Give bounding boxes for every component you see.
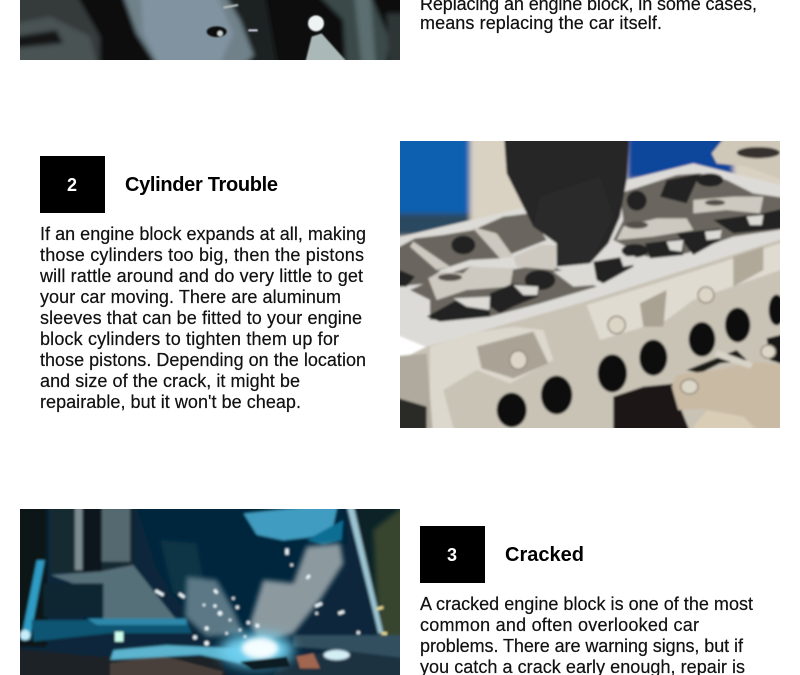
left glow bar: [21, 560, 45, 640]
text block: cylinder trouble description: will rattle around and do very little to get: [39, 266, 363, 286]
cylinder ports: [497, 295, 785, 427]
panel: section 3 cracked: [420, 526, 753, 675]
text block: cracked description: common and often overlooked car: [420, 615, 699, 635]
bench: [32, 620, 192, 642]
dark bottom area: [612, 382, 690, 428]
text block: top section continuation: means replacing the car itself.: [420, 13, 662, 33]
heading: cracked: Cracked: [505, 544, 584, 566]
number badge 2: [40, 156, 105, 213]
photo: gloved hand on cylinder head: [400, 141, 780, 428]
number badge 3: 3: [447, 545, 457, 565]
text block: cracked description: A cracked engine block is one of the most: [420, 594, 753, 614]
block front face: [410, 239, 780, 428]
text block: cylinder trouble description: If an engine block expands at all, making: [40, 224, 366, 244]
number badge 2: 2: [67, 175, 77, 195]
text block: cylinder trouble description: and size of the crack, it might be: [40, 371, 300, 391]
text block: cylinder trouble description: those cylinders too big, then the pistons: [40, 245, 364, 265]
number badge 3: [420, 526, 485, 583]
background structure: [20, 509, 48, 649]
lower left corner: [400, 353, 434, 428]
bottom right plate: [670, 362, 780, 428]
glove: [503, 127, 630, 267]
valve cavities: [393, 173, 800, 320]
photo: engine bay (top): [20, 0, 400, 60]
text block: cylinder trouble description: [39, 224, 366, 412]
arc flash: [220, 633, 293, 667]
text block: cylinder trouble description: block cylinders to tighten them up for: [40, 329, 339, 349]
text block: cracked description: problems. There are warning signs, but if: [420, 636, 744, 656]
right side: [354, 509, 400, 632]
bolts: [510, 287, 776, 394]
face shield: [243, 503, 338, 541]
flange top right: [710, 141, 780, 178]
text block: cracked description: [420, 594, 753, 675]
text block: cylinder trouble description: repairable, but it won't be cheap.: [40, 392, 301, 412]
photo: welding sparks: [20, 509, 400, 675]
sparks: [155, 549, 387, 646]
text block: cylinder trouble description: those pistons. Depending on the location: [40, 350, 366, 370]
text block: top section continuation: [420, 0, 757, 33]
welder body: [138, 509, 348, 628]
rocker arms: [393, 173, 800, 322]
car bottom: [20, 647, 227, 675]
heading: cylinder trouble: Cylinder Trouble: [125, 174, 278, 196]
text block: cylinder trouble description: your car moving. There are aluminum: [40, 287, 341, 307]
backdrop: [400, 141, 780, 238]
panel: section 2 cylinder trouble: [39, 156, 366, 412]
block top deck: [393, 163, 800, 350]
text block: cylinder trouble description: sleeves that can be fitted to your engine: [40, 308, 362, 328]
arm and glove: [250, 543, 343, 643]
